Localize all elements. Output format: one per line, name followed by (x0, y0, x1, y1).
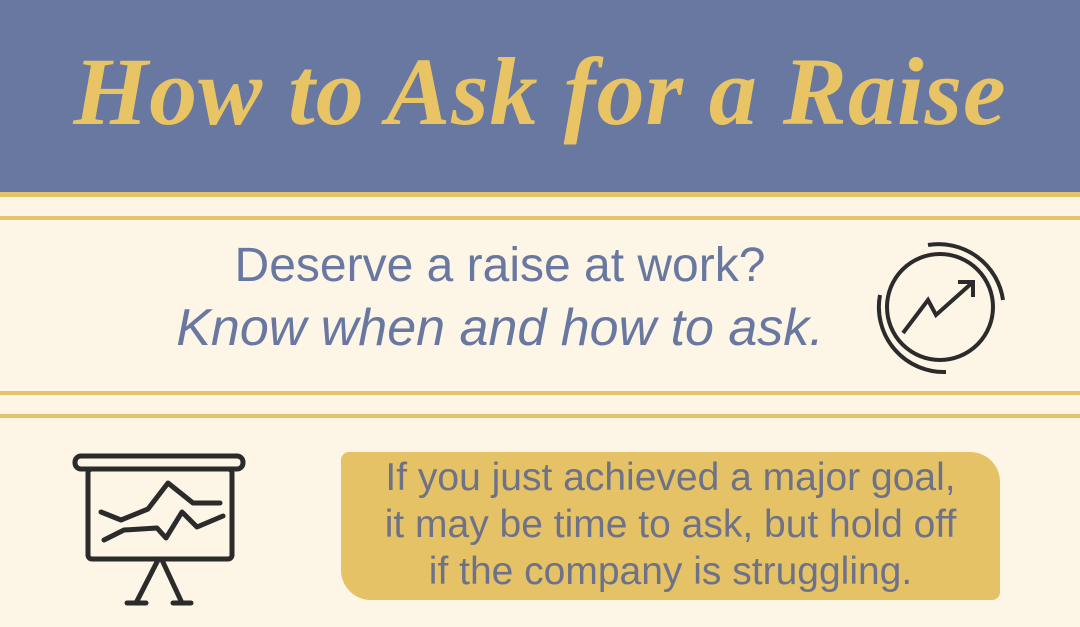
title: How to Ask for a Raise (73, 38, 1007, 145)
callout text: If you just achieved a major goal, (385, 456, 956, 499)
intro text: Deserve a raise at work? (235, 239, 765, 292)
callout text: if the company is struggling. (429, 550, 912, 593)
callout text (385, 456, 956, 593)
icon: presentation board (72, 454, 246, 606)
intro text: Know when and how to ask. (176, 299, 824, 357)
callout text: it may be time to ask, but hold off (385, 503, 956, 546)
icon: growth circle (876, 242, 1005, 374)
callout (341, 452, 1000, 600)
header band (0, 0, 1080, 192)
intro text (176, 239, 824, 357)
